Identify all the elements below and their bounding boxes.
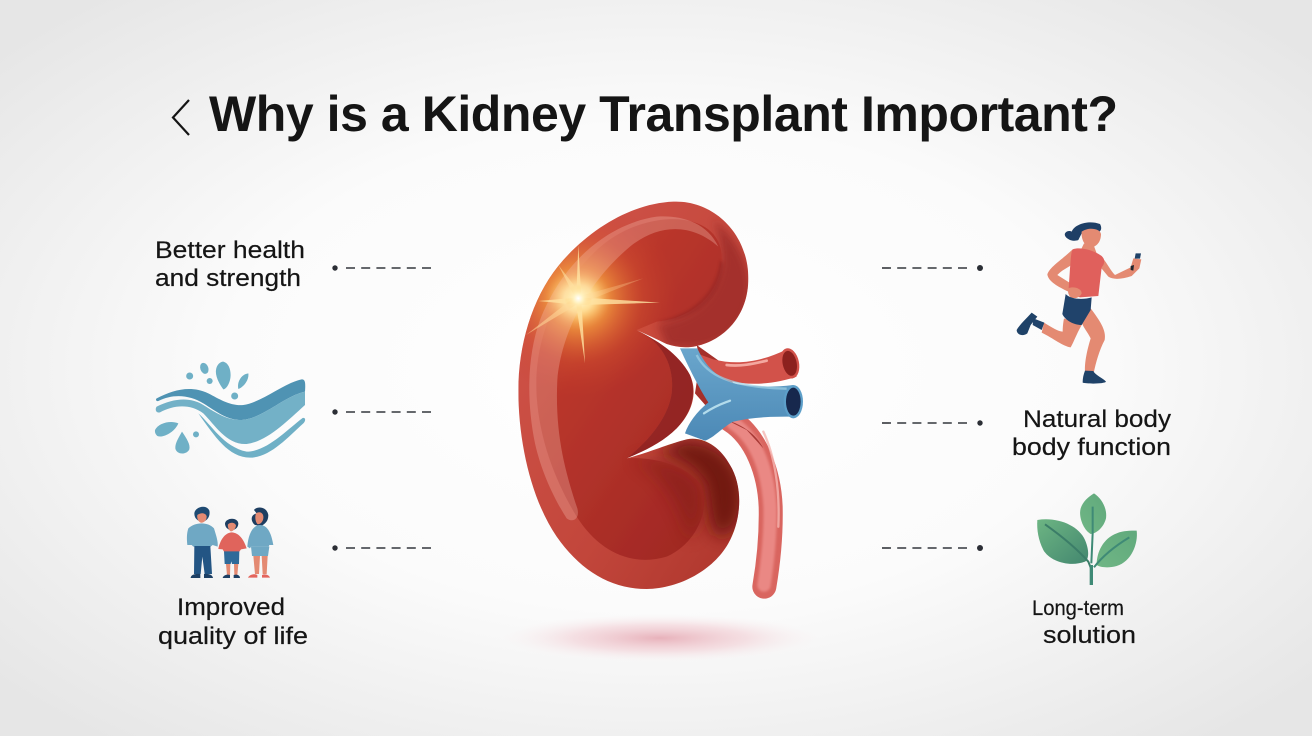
label: better health: Better health [155, 237, 305, 264]
icon: family [187, 507, 273, 578]
child [225, 519, 238, 530]
connector: family [332, 545, 434, 551]
icon: running woman [1017, 222, 1141, 384]
title [173, 86, 1118, 142]
upper lobe inner shade [662, 262, 723, 322]
connector: natural body [882, 420, 983, 426]
label: long-term solution: solution [1043, 622, 1136, 649]
artery [695, 345, 802, 407]
right rows [882, 222, 1171, 649]
label: natural body function [1012, 406, 1171, 461]
label: long-term solution: Long-term [1032, 596, 1124, 620]
label: quality of life [158, 594, 308, 650]
label: quality of life: Improved [177, 594, 285, 621]
label: better health [155, 237, 305, 292]
icon: green leaves [1037, 493, 1137, 585]
label: natural body function: Natural body [1023, 406, 1171, 433]
icon: water wave [155, 362, 305, 458]
connector: water [332, 409, 434, 415]
long highlight [529, 216, 718, 520]
middle lobe rim shade [627, 330, 693, 458]
renal vein [680, 348, 803, 441]
icon: back chevron [173, 100, 189, 135]
kidney body [518, 202, 748, 589]
kidney floor shadow [502, 614, 818, 662]
ureter [727, 420, 779, 587]
lower lobe dark rim [657, 440, 743, 537]
label: better health: and strength [155, 265, 301, 292]
orange glow [520, 220, 654, 370]
illustration: kidney with vessels [518, 202, 803, 599]
connector: leaf [882, 545, 983, 551]
upper lobe rim shade [657, 220, 750, 348]
label: long-term solution [1032, 596, 1136, 649]
father [194, 507, 210, 522]
label: natural body function: body function [1012, 434, 1171, 461]
connector: better health [332, 265, 434, 271]
left rows [155, 237, 434, 650]
mother [252, 507, 268, 526]
light flare [526, 245, 660, 363]
inner body [536, 219, 722, 560]
connector: runner [882, 265, 983, 271]
lower lobe soft dark [644, 455, 704, 536]
title text: Why is a Kidney Transplant Important? [209, 86, 1118, 142]
label: quality of life: quality of life [158, 623, 308, 650]
